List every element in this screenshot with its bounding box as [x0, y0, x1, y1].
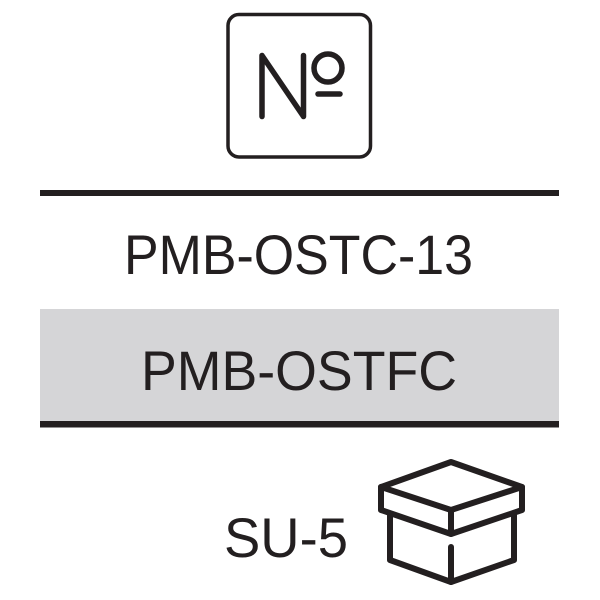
icon: number sign in rounded square — [228, 14, 370, 157]
product code text: PMB-OSTC-13 — [124, 223, 473, 286]
icon: box — [381, 462, 522, 582]
standard unit text: SU-5 — [224, 506, 348, 569]
shaded row: fitting code: PMB-OSTFC — [141, 339, 457, 402]
shaded row: fitting code — [40, 309, 559, 422]
bottom divider line — [40, 421, 559, 428]
top divider line — [40, 190, 559, 196]
